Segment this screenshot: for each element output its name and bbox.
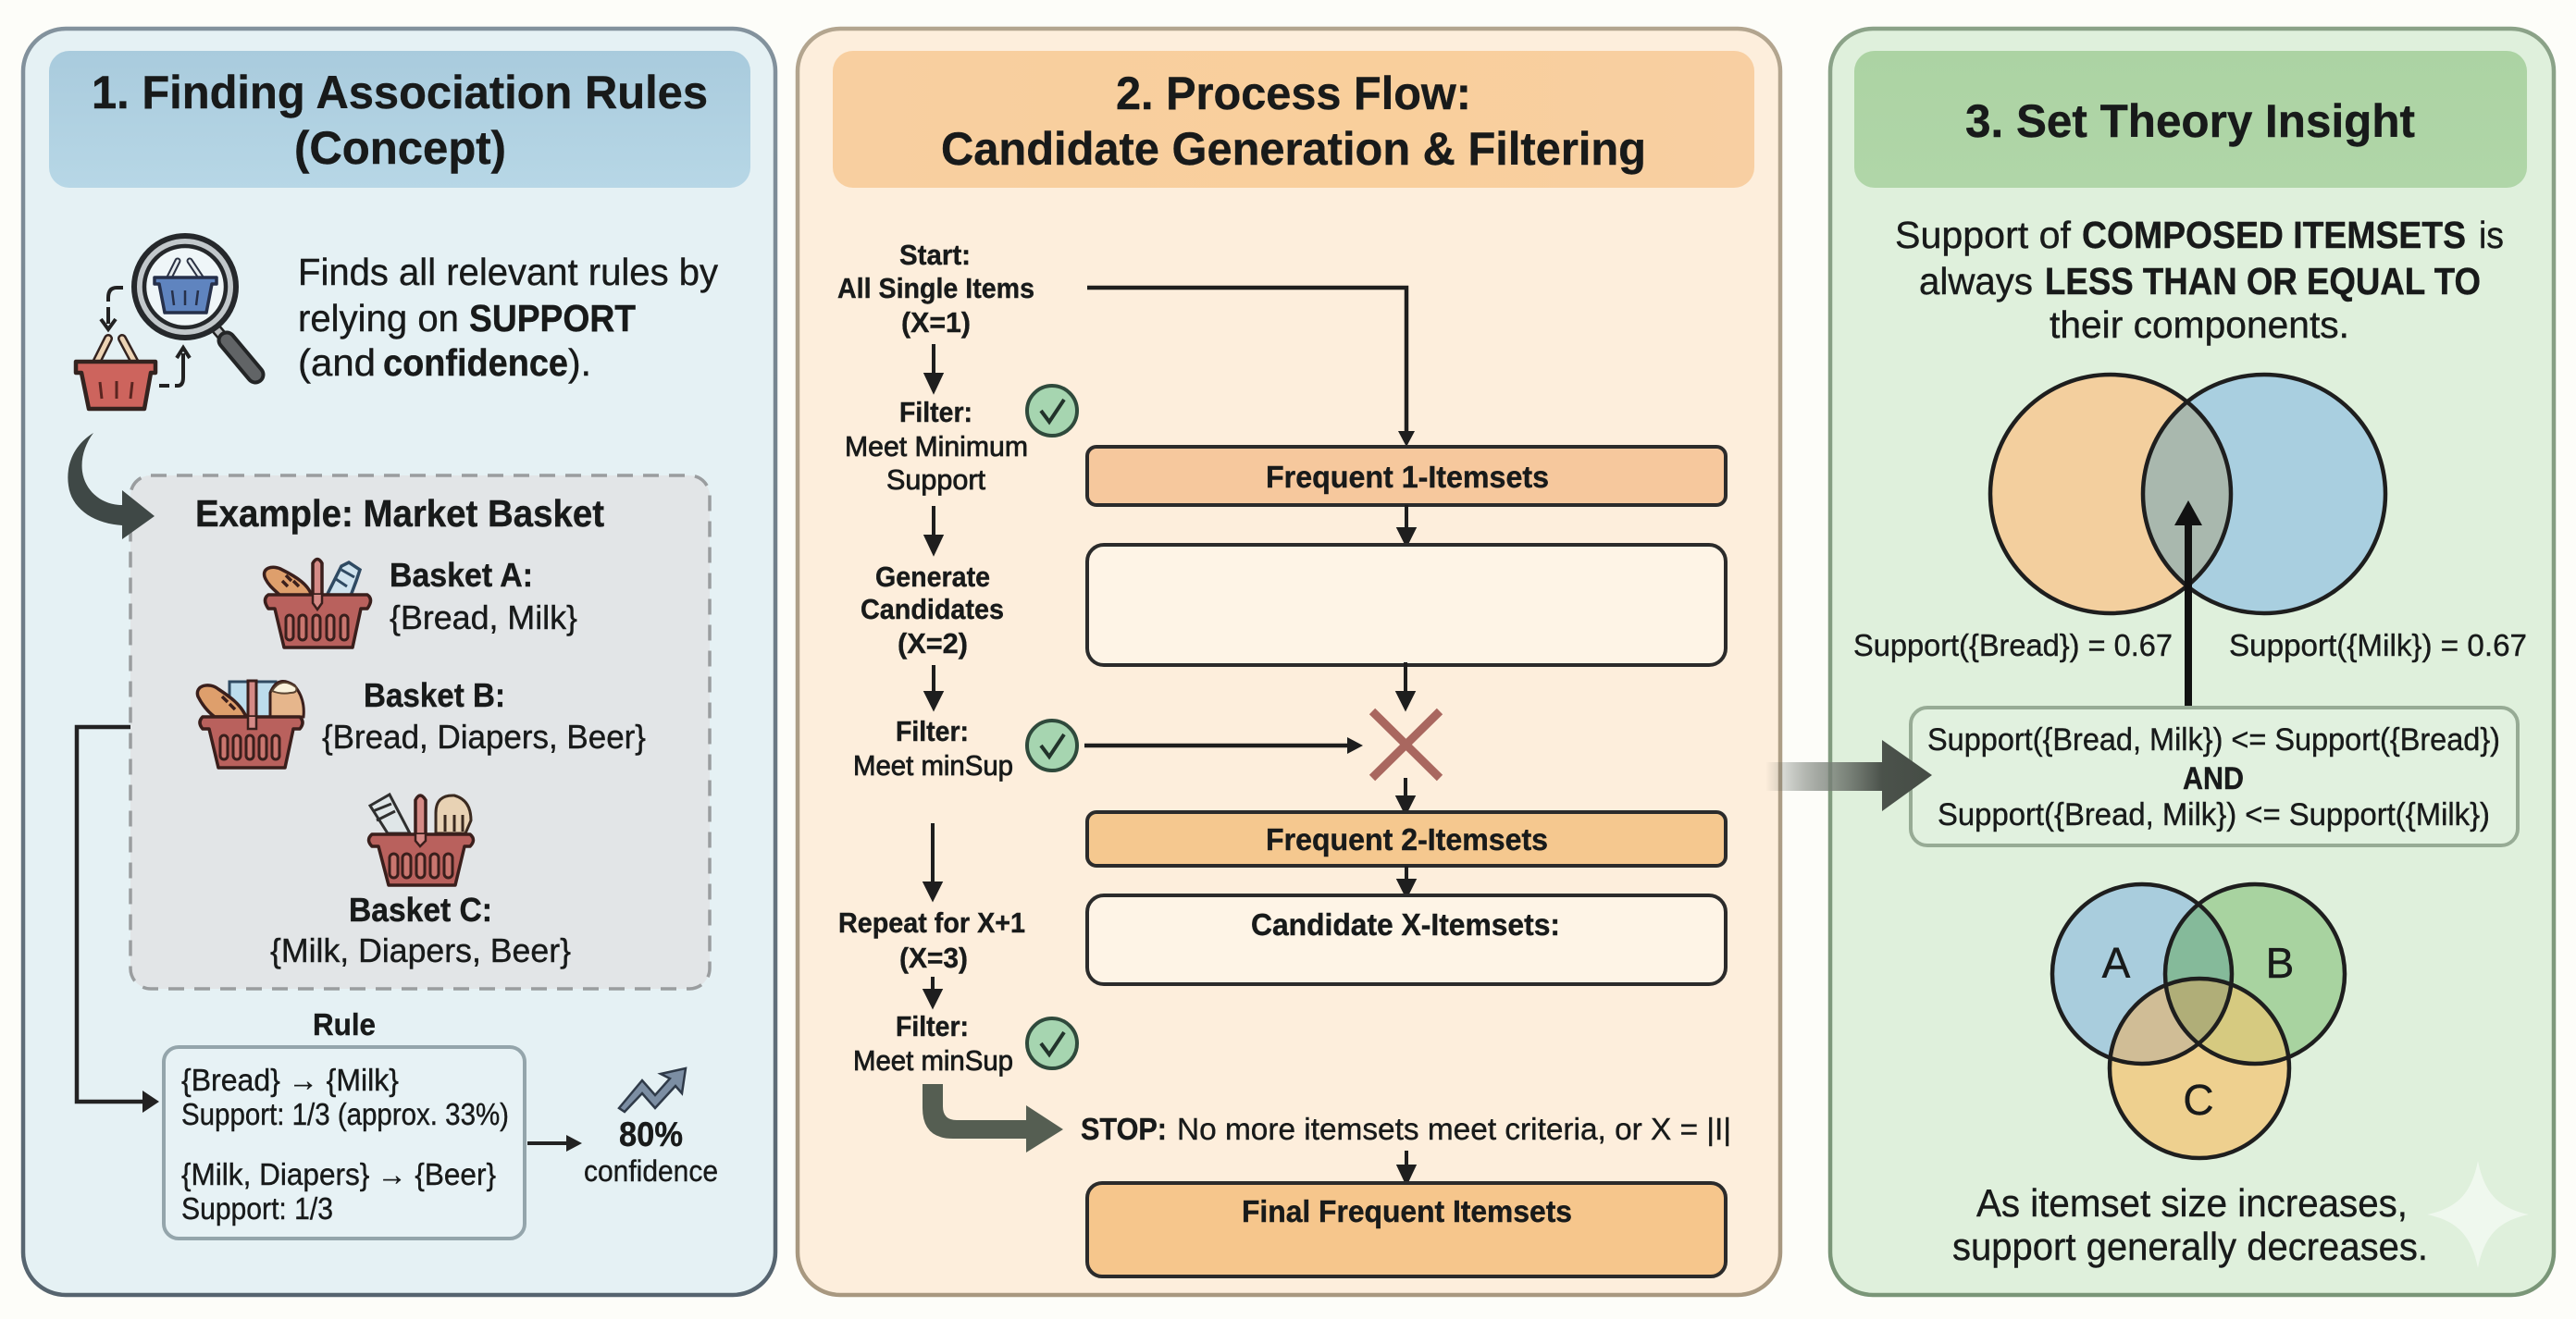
text: basket B: Basket B: bbox=[364, 676, 505, 714]
rule box: {Milk, Diapers} → {Beer} bbox=[181, 1157, 496, 1191]
step: generate candidates bbox=[861, 561, 1004, 660]
arrow: frequent 1 to candidates bbox=[1399, 505, 1414, 544]
text: 80% confidence bbox=[584, 1116, 718, 1188]
panel: finding association rules bbox=[23, 29, 775, 1295]
arrow: curved to example bbox=[68, 433, 155, 539]
panel 1 background bbox=[23, 29, 775, 1295]
heading: process flow bbox=[941, 68, 1646, 175]
icon: red cross bbox=[1372, 711, 1440, 778]
text: basket A: {Bread, Milk} bbox=[390, 598, 577, 636]
arrow: stop to final bbox=[1399, 1151, 1414, 1182]
icon: magnifier over baskets bbox=[76, 236, 255, 409]
formula box bbox=[1911, 708, 2518, 845]
heading: example market basket: Example: Market Basket bbox=[195, 492, 604, 535]
icon: basket A bbox=[265, 559, 370, 647]
panel 1 header bar bbox=[49, 51, 750, 188]
icon: check 2 bbox=[1027, 721, 1077, 770]
arrow: rule to confidence bbox=[527, 1135, 582, 1152]
text: intro description: ). bbox=[568, 341, 591, 384]
step: repeat bbox=[838, 906, 1025, 974]
arrow: repeat to filter bbox=[925, 977, 940, 1005]
text: composed itemsets statement: COMPOSED ITEMSETS bbox=[2082, 214, 2466, 256]
arrow: generate to filter bbox=[926, 665, 941, 708]
panel: example market basket bbox=[130, 475, 710, 989]
step: filter minimum support bbox=[845, 396, 1028, 496]
text: basket B: {Bread, Diapers, Beer} bbox=[322, 718, 646, 756]
rule box: Support: 1/3 (approx. 33%) bbox=[181, 1097, 509, 1131]
rule box: {Bread} → {Milk} bbox=[181, 1063, 399, 1097]
text: basket C bbox=[270, 891, 571, 969]
step: filter minsup bbox=[853, 715, 1013, 782]
step: start: All Single Items bbox=[837, 272, 1034, 304]
text: basket A bbox=[390, 556, 577, 636]
panel: process flow bbox=[798, 29, 1780, 1295]
arrow: candidates to cross bbox=[1398, 662, 1413, 708]
step: start: Start: bbox=[899, 239, 971, 271]
text: stop condition: STOP: bbox=[1081, 1112, 1167, 1146]
icon: trend arrow bbox=[619, 1068, 686, 1112]
arrow: filter to repeat bbox=[925, 823, 940, 898]
formula box: Support({Bread, Milk}) <= Support({Bread}) bbox=[1927, 722, 2500, 758]
heading: set theory insight: 3. Set Theory Insight bbox=[1965, 95, 2415, 147]
text: composed itemsets statement bbox=[1895, 214, 2504, 346]
text: conclusion: As itemset size increases, bbox=[1976, 1181, 2408, 1225]
label: set C: C bbox=[2183, 1076, 2214, 1124]
text: intro description: relying on bbox=[298, 297, 459, 339]
text: intro description: SUPPORT bbox=[469, 297, 636, 339]
heading: finding association rules: 1. Finding Association Rules bbox=[92, 67, 708, 118]
step: filter minimum support: Support bbox=[886, 463, 985, 496]
panel 3 header bar bbox=[1854, 51, 2527, 188]
icon: basket C bbox=[368, 795, 474, 885]
box: candidate x-itemsets: Candidate X-Itemsets: bbox=[1251, 907, 1560, 942]
step: filter minsup: Filter: bbox=[896, 715, 969, 747]
rule box: Support: 1/3 bbox=[181, 1191, 333, 1226]
box: frequent 2-itemsets bbox=[1087, 812, 1726, 866]
box: candidate x-itemsets bbox=[1087, 895, 1726, 984]
heading: process flow: Candidate Generation & Filtering bbox=[941, 123, 1646, 175]
text: support milk: Support({Milk}) = 0.67 bbox=[2229, 628, 2527, 662]
step: generate candidates: (X=2) bbox=[898, 627, 968, 660]
step: filter minsup repeat: Filter: bbox=[896, 1010, 969, 1042]
text: intro description bbox=[298, 251, 718, 384]
panel 2 background bbox=[798, 29, 1780, 1295]
arrow: process to insight bbox=[1765, 740, 1932, 811]
step: repeat: (X=3) bbox=[899, 942, 968, 974]
arrow: example to rule bbox=[77, 727, 159, 1113]
icon: basket B bbox=[197, 681, 303, 768]
arrow: cross to frequent 2 bbox=[1398, 778, 1413, 812]
panel 2 header bar bbox=[833, 51, 1754, 188]
heading: process flow: 2. Process Flow: bbox=[1116, 68, 1471, 119]
heading: finding association rules bbox=[92, 67, 708, 174]
panel 3 background bbox=[1830, 29, 2554, 1295]
box: final frequent itemsets bbox=[1087, 1183, 1726, 1276]
arrow: filter to cross bbox=[1084, 737, 1363, 754]
panel: set theory insight bbox=[1830, 29, 2554, 1295]
text: support bread: Support({Bread}) = 0.67 bbox=[1853, 628, 2173, 662]
rule box bbox=[164, 1047, 525, 1239]
text: composed itemsets statement: is bbox=[2479, 214, 2504, 256]
text: composed itemsets statement: always bbox=[1919, 260, 2033, 302]
step: filter minimum support: Meet Minimum bbox=[845, 430, 1028, 462]
box: frequent 2-itemsets: Frequent 2-Itemsets bbox=[1266, 822, 1548, 857]
step: generate candidates: Candidates bbox=[861, 593, 1004, 625]
step: filter minsup repeat bbox=[853, 1010, 1013, 1077]
formula box: Support({Bread, Milk}) <= Support({Milk}) bbox=[1938, 797, 2490, 832]
icon: check 3 bbox=[1027, 1018, 1077, 1068]
heading: finding association rules: (Concept) bbox=[294, 122, 506, 174]
box: frequent 1-itemsets: Frequent 1-Itemsets bbox=[1266, 460, 1549, 494]
icon: check 1 bbox=[1027, 386, 1077, 436]
step: generate candidates: Generate bbox=[875, 561, 990, 593]
box: final frequent itemsets: Final Frequent Itemsets bbox=[1242, 1194, 1572, 1228]
text: composed itemsets statement: their components. bbox=[2050, 303, 2349, 346]
formula box: AND bbox=[2183, 761, 2244, 796]
icon: sparkle watermark bbox=[2427, 1161, 2529, 1268]
step: filter minimum support: Filter: bbox=[899, 396, 972, 428]
step: filter minsup: Meet minSup bbox=[853, 749, 1013, 782]
arrow: start to filter bbox=[926, 344, 941, 390]
text: stop condition: No more itemsets meet criteria, or X = |I| bbox=[1177, 1112, 1731, 1146]
step: start: (X=1) bbox=[901, 306, 971, 339]
text: intro description: confidence bbox=[383, 341, 568, 384]
arrow: thick to stop bbox=[923, 1084, 1063, 1153]
text: composed itemsets statement: Support of bbox=[1895, 214, 2072, 256]
text: intro description: Finds all relevant rules by bbox=[298, 251, 718, 293]
step: repeat: Repeat for X+1 bbox=[838, 906, 1025, 939]
text: basket C: {Milk, Diapers, Beer} bbox=[270, 931, 571, 969]
text: composed itemsets statement: LESS THAN OR EQUAL TO bbox=[2045, 260, 2481, 302]
step: start bbox=[837, 239, 1034, 339]
label: set B: B bbox=[2266, 939, 2294, 987]
step: filter minsup repeat: Meet minSup bbox=[853, 1044, 1013, 1077]
text: intro description: (and bbox=[298, 341, 376, 384]
heading: rule: Rule bbox=[313, 1007, 376, 1042]
box: empty candidates bbox=[1087, 545, 1726, 665]
text: basket B bbox=[322, 676, 646, 756]
chart: three-set venn diagram bbox=[2052, 884, 2345, 1158]
text: conclusion: support generally decreases. bbox=[1952, 1225, 2428, 1268]
example box bbox=[130, 475, 710, 989]
text: basket A: Basket A: bbox=[390, 556, 533, 594]
text: conclusion bbox=[1952, 1181, 2428, 1268]
text: 80% confidence: 80% bbox=[619, 1116, 683, 1153]
box: frequent 1-itemsets bbox=[1087, 447, 1726, 505]
arrow: filter to generate bbox=[926, 506, 941, 552]
arrow: formula to intersection bbox=[2174, 500, 2202, 708]
label: set A: A bbox=[2102, 939, 2131, 987]
chart: two-set venn diagram bbox=[1990, 375, 2385, 613]
text: basket C: Basket C: bbox=[349, 891, 492, 929]
arrow: frequent 2 to candidate X bbox=[1399, 866, 1414, 895]
arrow: start to frequent 1-itemsets bbox=[1087, 288, 1415, 447]
text: 80% confidence: confidence bbox=[584, 1154, 718, 1188]
